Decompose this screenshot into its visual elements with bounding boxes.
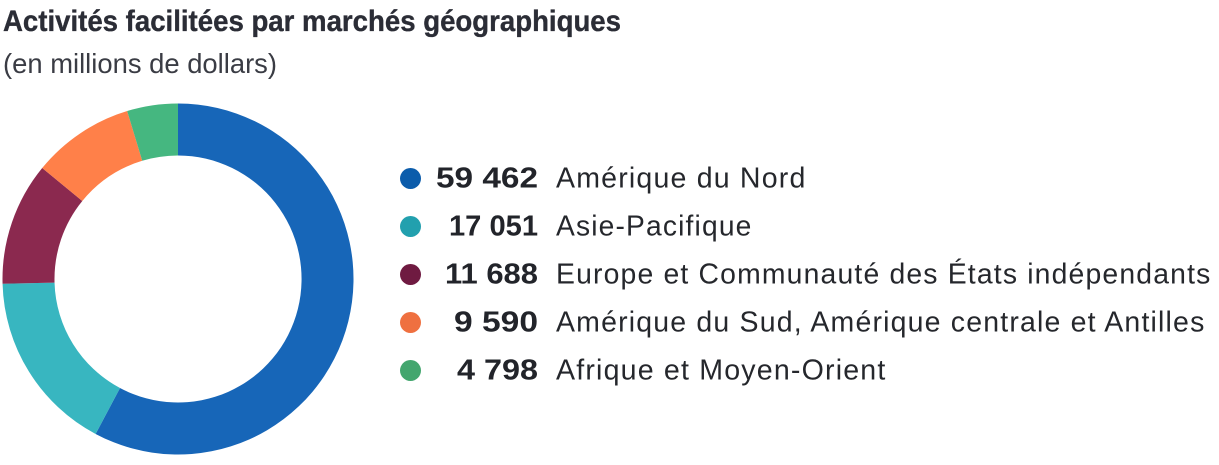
legend row: Afrique et Moyen-Orient: [400, 354, 886, 386]
legend row: Afrique et Moyen-Orient: Afrique et Moyen-Orient: [556, 354, 886, 386]
legend row: Asie-Pacifique: 17 051: [449, 210, 538, 242]
legend row: Amérique du Sud, Amérique centrale et Antilles: 9 590: [454, 306, 538, 338]
legend row: Asie-Pacifique: [400, 210, 752, 242]
donut chart: [2, 104, 354, 454]
legend row: Amérique du Nord: [400, 162, 806, 194]
legend row: Amérique du Nord: Amérique du Nord: [556, 162, 806, 194]
legend row: Afrique et Moyen-Orient: 4 798: [457, 354, 538, 386]
segment: Amérique du Sud: [42, 111, 142, 201]
segment: Amérique du Nord: [96, 104, 354, 454]
segment: Asie-Pacifique: [3, 283, 120, 434]
legend row: Asie-Pacifique: Asie-Pacifique: [556, 210, 752, 242]
segment: Afrique et Moyen-Orient: [127, 104, 178, 161]
legend row: Amérique du Sud, Amérique centrale et Antilles: Amérique du Sud, Amérique centrale et Antilles: [556, 306, 1206, 338]
subtitle: (en millions de dollars): [3, 48, 277, 79]
legend row: Amérique du Nord: 59 462: [436, 162, 538, 194]
legend row: Europe et Communauté des États indépendants: Europe et Communauté des États indépendants: [556, 258, 1212, 290]
title: Activités facilitées par marchés géographiques: [3, 5, 621, 38]
legend: [400, 162, 1212, 386]
segment: Europe et CEI: [2, 168, 82, 284]
legend row: Europe et Communauté des États indépendants: 11 688: [445, 258, 538, 290]
